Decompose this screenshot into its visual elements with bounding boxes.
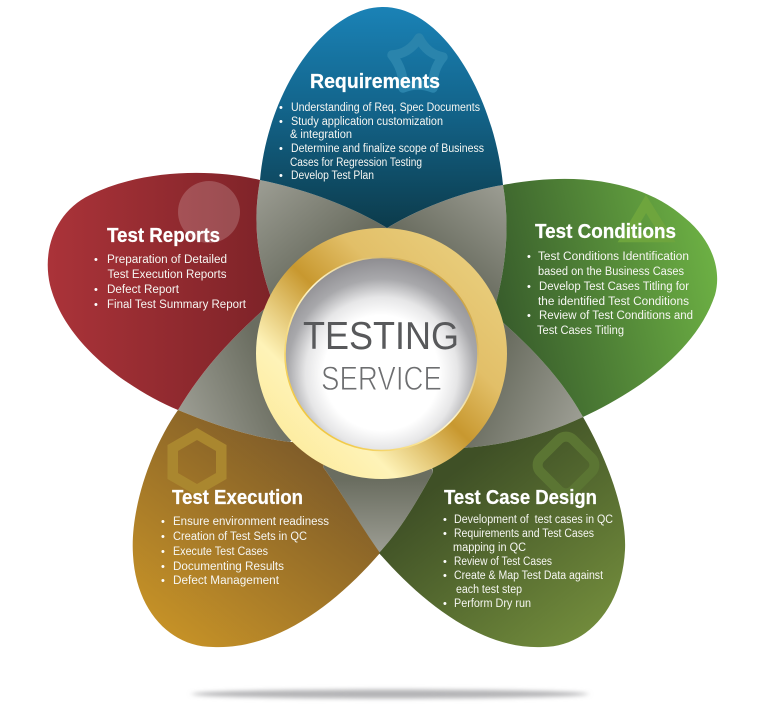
- list: test case design: Development of test cases in QC: [454, 514, 613, 526]
- list: requirements: & integration: [290, 129, 352, 141]
- list: test conditions: based on the Business Cases: [538, 266, 684, 278]
- panel: test reports: [48, 173, 272, 410]
- list: test case design: each test step: [456, 584, 522, 596]
- list: test execution: •: [161, 575, 165, 587]
- list: test conditions: Review of Test Conditions and: [539, 310, 693, 322]
- list: test reports: •: [94, 284, 98, 296]
- list: test case design: •: [443, 514, 447, 526]
- list: requirements: •: [279, 102, 283, 114]
- list: test case design: •: [443, 528, 447, 540]
- list: test conditions: Develop Test Cases Titling for: [539, 281, 689, 293]
- icon: rounded diamond outline: [533, 432, 599, 498]
- list: test conditions: •: [527, 310, 531, 322]
- list: test case design: Review of Test Cases: [454, 556, 552, 568]
- list: test execution: Execute Test Cases: [173, 546, 268, 558]
- list: test execution: •: [161, 516, 165, 528]
- list: test case design: •: [443, 570, 447, 582]
- heading: test execution: Test Execution: [172, 487, 303, 509]
- list: test reports: [94, 254, 247, 311]
- list: requirements: Understanding of Req. Spec Documents: [291, 102, 480, 114]
- panel: test case design: [379, 417, 625, 647]
- list: requirements: Develop Test Plan: [291, 170, 374, 182]
- list: test conditions: the identified Test Conditions: [538, 296, 689, 308]
- list: requirements: Study application customization: [291, 116, 443, 128]
- list: test case design: •: [443, 556, 447, 568]
- ground shadow: [192, 690, 588, 698]
- list: test reports: Final Test Summary Report: [107, 299, 247, 311]
- list: test execution: [161, 516, 329, 587]
- center badge: gold ring: [256, 228, 507, 479]
- icon: hexagon outline: [173, 434, 221, 490]
- icon: circle: [178, 181, 240, 243]
- heading: test reports: Test Reports: [107, 225, 220, 247]
- list: test conditions: Test Cases Titling: [537, 325, 624, 337]
- list: requirements: •: [279, 170, 283, 182]
- list: test reports: •: [94, 254, 98, 266]
- icon: triangle outline: [626, 204, 667, 238]
- list: test conditions: Test Conditions Identification: [538, 251, 689, 263]
- heading: test conditions: Test Conditions: [535, 221, 676, 243]
- list: test execution: Documenting Results: [173, 561, 284, 573]
- list: test case design: Create & Map Test Data against: [454, 570, 604, 582]
- heading: requirements: Requirements: [310, 71, 440, 93]
- list: test reports: Defect Report: [107, 284, 180, 296]
- heading: test case design: Test Case Design: [444, 487, 597, 509]
- icon: star outline: [392, 38, 443, 88]
- list: test conditions: •: [527, 251, 531, 263]
- list: test execution: Creation of Test Sets in QC: [173, 531, 307, 543]
- list: test reports: Test Execution Reports: [108, 269, 227, 281]
- list: test conditions: [527, 251, 693, 337]
- list: test case design: •: [443, 598, 447, 610]
- list: requirements: [279, 102, 484, 182]
- panel: test conditions: [480, 179, 717, 417]
- grey overlap areas between petals: [178, 180, 583, 553]
- list: test execution: Defect Management: [173, 575, 280, 587]
- list: requirements: •: [279, 116, 283, 128]
- panel: requirements: [260, 7, 503, 228]
- list: test conditions: •: [527, 281, 531, 293]
- list: test execution: •: [161, 546, 165, 558]
- list: test case design: [443, 514, 613, 610]
- list: requirements: Determine and finalize scope of Business: [291, 143, 484, 155]
- list: test case design: Requirements and Test Cases: [454, 528, 594, 540]
- list: test execution: •: [161, 561, 165, 573]
- panel: test execution: [133, 410, 380, 647]
- list: test case design: Perform Dry run: [454, 598, 531, 610]
- center title: testing: TESTING: [303, 315, 459, 358]
- list: requirements: •: [279, 143, 283, 155]
- list: test reports: •: [94, 299, 98, 311]
- center subtitle: service: SERVICE: [321, 360, 442, 398]
- list: test reports: Preparation of Detailed: [107, 254, 227, 266]
- list: test case design: mapping in QC: [453, 542, 526, 554]
- list: test execution: •: [161, 531, 165, 543]
- center disc: [285, 258, 478, 450]
- list: test execution: Ensure environment readiness: [173, 516, 329, 528]
- list: requirements: Cases for Regression Testing: [290, 157, 422, 169]
